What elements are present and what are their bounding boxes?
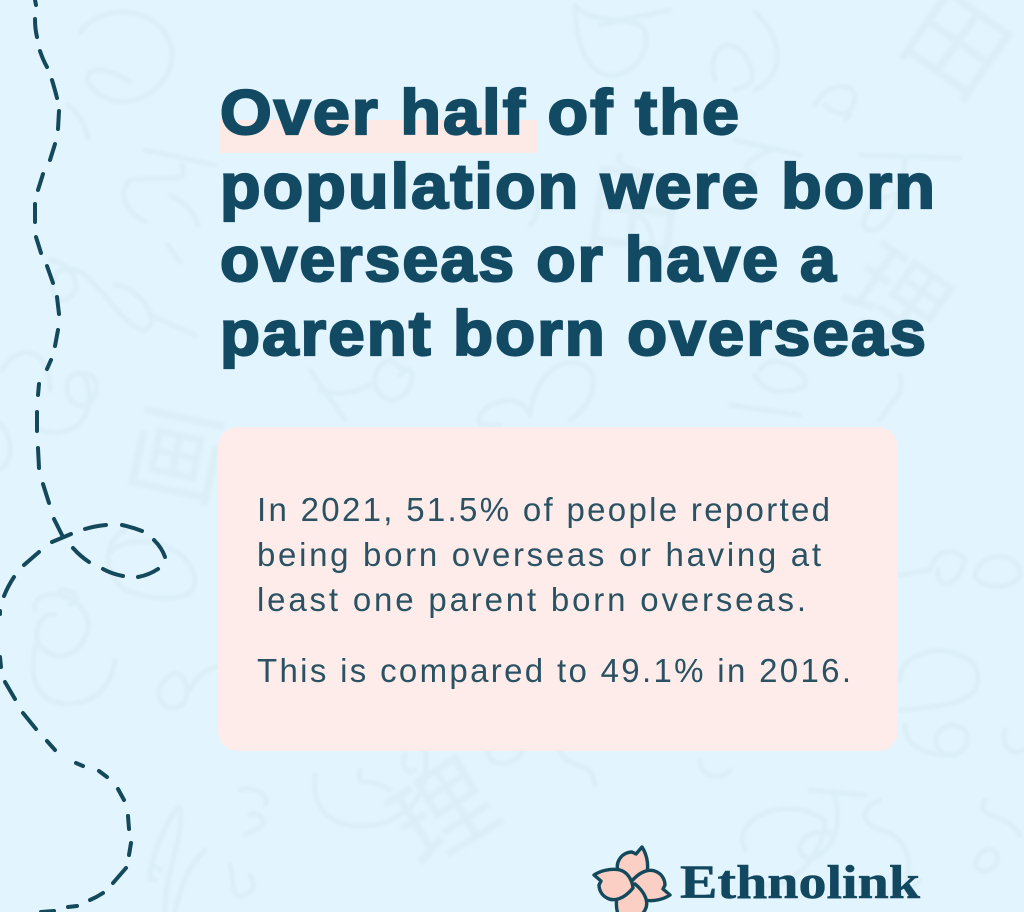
text: 田	[577, 151, 692, 276]
logo wordmark: Ethnolink	[680, 856, 920, 909]
text block: 2016 comparison: This is compared to 49.1% in 2016.	[257, 652, 851, 689]
text block: 2021 statistic: being born overseas or having at	[257, 536, 821, 573]
title: overseas or have a	[220, 225, 838, 295]
text block: 2021 statistic	[257, 491, 830, 618]
title: Over half of the	[220, 78, 741, 148]
title: population were born	[220, 152, 937, 222]
text block: 2021 statistic: least one parent born overseas.	[257, 581, 806, 618]
text block: 2021 statistic: In 2021, 51.5% of people reported	[257, 491, 830, 528]
title: parent born overseas	[220, 299, 928, 369]
title highlight	[219, 120, 538, 153]
text: 理	[822, 226, 969, 375]
text: 画	[115, 392, 237, 522]
panel: statistic callout	[218, 427, 898, 751]
title	[220, 78, 937, 369]
icon: Ethnolink flower logo	[594, 847, 670, 912]
text: 理	[372, 741, 516, 889]
dashed journey line	[0, 0, 165, 912]
